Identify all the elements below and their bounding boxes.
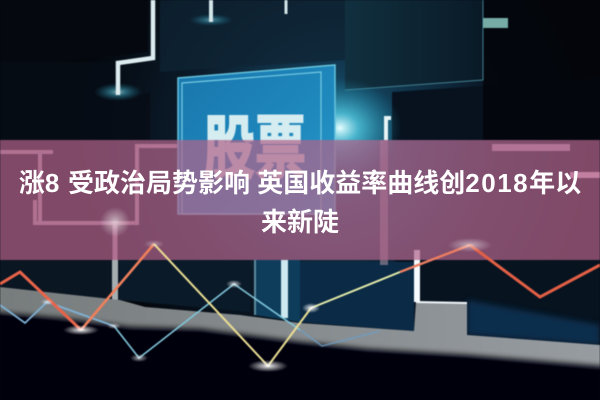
pink overlay band — [0, 140, 600, 260]
panel edge lines — [345, 0, 483, 90]
chart sparkle points — [41, 207, 492, 372]
dark ground — [0, 312, 600, 400]
title text on band: 涨8 受政治局势影响 英国收益率曲线创2018年以来新陡 — [19, 168, 581, 237]
red and yellow line chart series — [0, 244, 600, 366]
cyan light glow — [278, 78, 402, 178]
teal wall tag — [483, 18, 508, 28]
sign lettering: 股票 — [204, 109, 306, 187]
frame post below band — [112, 260, 118, 302]
floor top highlight — [416, 302, 467, 303]
white neon bracket — [118, 0, 153, 95]
pale frames behind band — [0, 146, 177, 300]
floor — [0, 287, 600, 370]
light bars — [254, 140, 600, 318]
blue stock sign panel — [178, 65, 335, 214]
white neon short lines — [211, 0, 286, 22]
glow at top lines — [189, 14, 233, 26]
glow beside white bracket — [94, 83, 142, 101]
blue line chart series — [0, 284, 380, 358]
small white post — [386, 118, 391, 140]
